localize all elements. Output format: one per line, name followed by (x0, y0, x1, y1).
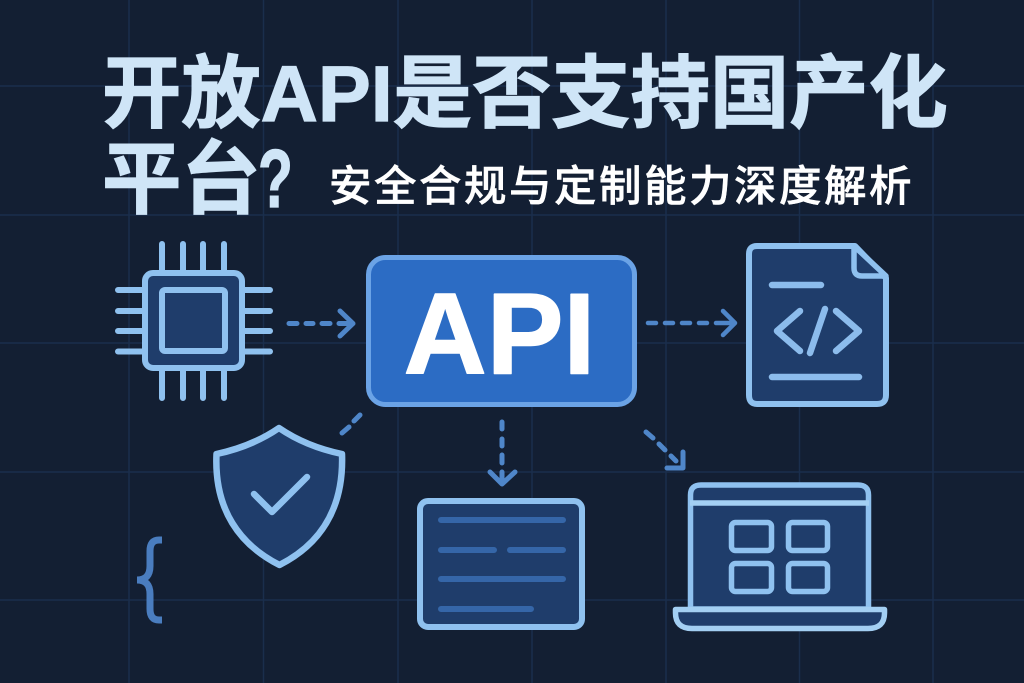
subtitle: 安全合规与定制能力深度解析 (329, 164, 914, 211)
API label: API (404, 270, 595, 398)
panel: text list (420, 501, 582, 627)
title: 平台 (102, 135, 261, 224)
dashes: API to shield (342, 415, 360, 433)
arrow: API to document (648, 311, 735, 335)
arrow: API to list panel (490, 422, 515, 484)
icon: chip (118, 244, 270, 398)
arrow: API to laptop (646, 432, 683, 468)
title: ? (258, 134, 293, 226)
icon: shield with check (216, 428, 342, 565)
window tiles (732, 522, 828, 592)
laptop base (676, 610, 884, 628)
API central box (368, 258, 634, 404)
title (102, 49, 948, 226)
icon: curly brace (137, 540, 162, 620)
list lines (441, 520, 563, 609)
icon: code document (749, 246, 886, 404)
icon: laptop (676, 485, 884, 628)
title: 开放API是否支持国产化 (102, 49, 948, 138)
arrow: chip to API (289, 311, 353, 336)
